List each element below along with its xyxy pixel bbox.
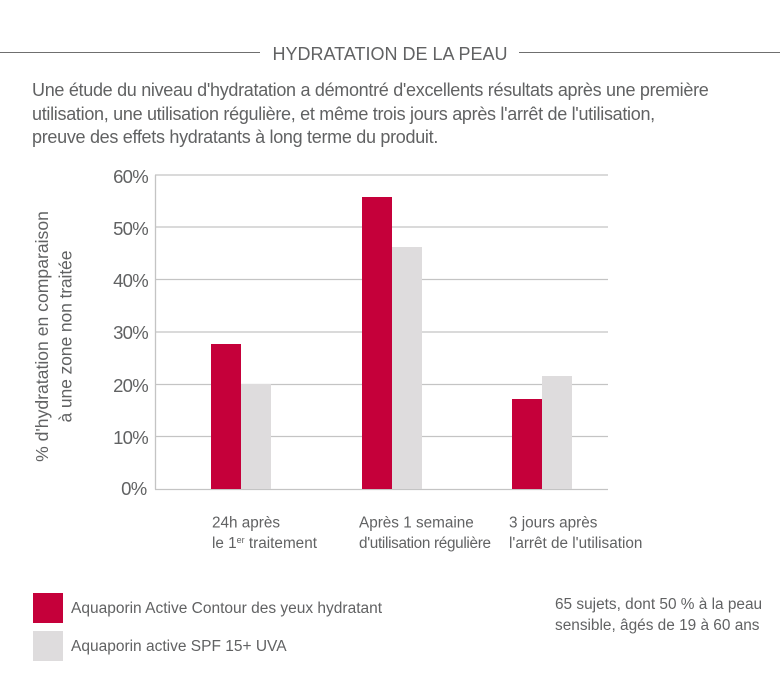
- bar chart: à une zone non traitée: [56, 250, 76, 422]
- bar chart: 0%: [121, 478, 147, 499]
- intro text: [32, 80, 708, 147]
- bar chart: traitement: [245, 535, 318, 552]
- bar chart: 30%: [113, 322, 148, 343]
- sample note: 65 sujets, dont 50 % à la peau: [555, 596, 762, 613]
- bar chart: Après 1 semaine: [359, 514, 474, 532]
- bar chart: 24h après: [212, 514, 280, 532]
- bar chart: % d'hydratation en comparaison: [32, 211, 52, 462]
- bar chart: 10%: [113, 427, 148, 448]
- sample note: [555, 596, 762, 634]
- intro text: Une étude du niveau d'hydratation a démontré d'excellents résultats après une première: [32, 80, 708, 100]
- legend: Aquaporin Active Contour des yeux hydratant: [71, 600, 382, 617]
- bar chart: le 1: [212, 535, 237, 552]
- bar chart: er: [237, 535, 245, 545]
- intro text: preuve des effets hydratants à long terme du produit.: [32, 127, 438, 147]
- bar chart: d'utilisation régulière: [359, 535, 491, 552]
- bar chart: l'arrêt de l'utilisation: [509, 535, 642, 552]
- bar chart: 20%: [113, 375, 148, 396]
- intro text: utilisation, une utilisation régulière, et même trois jours après l'arrêt de l'utilisation,: [32, 104, 655, 124]
- title with side rules: HYDRATATION DE LA PEAU: [272, 44, 508, 64]
- bar chart: 60%: [113, 166, 148, 187]
- bar chart: 3 jours après: [509, 514, 598, 532]
- legend: Aquaporin active SPF 15+ UVA: [71, 638, 287, 654]
- bar chart: 40%: [113, 270, 148, 291]
- legend: [33, 593, 382, 661]
- bar chart: 50%: [113, 218, 148, 239]
- sample note: sensible, âgés de 19 à 60 ans: [555, 616, 760, 634]
